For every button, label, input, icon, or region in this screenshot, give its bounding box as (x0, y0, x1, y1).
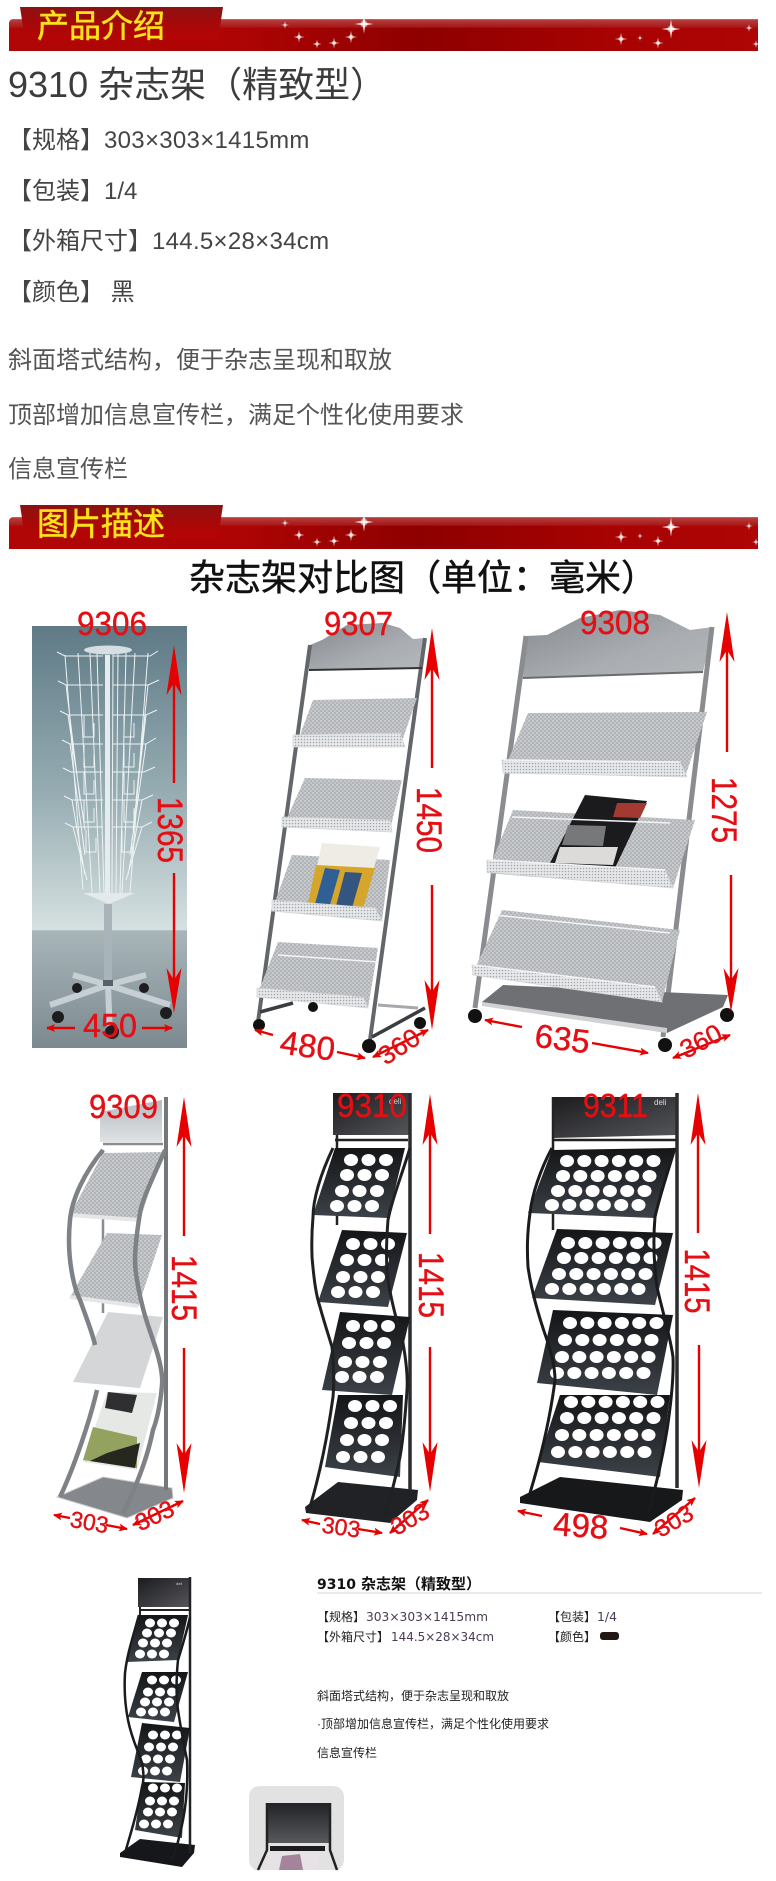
banner: image description: 图片描述 (37, 506, 165, 542)
text block: product features: 顶部增加信息宣传栏，满足个性化使用要求 (8, 402, 464, 429)
dimension labels: rack 9311: 303 (650, 1500, 698, 1543)
dimension labels: rack 9308: 360 (675, 1018, 727, 1064)
product: rack 9307 (253, 623, 426, 1053)
dimension labels: rack 9308 (485, 604, 743, 1064)
text block: mini features (317, 1688, 549, 1760)
text block: product features: 信息宣传栏 (8, 456, 128, 483)
product: rack 9306 (32, 626, 187, 1048)
dimension labels: rack 9306: 450 (83, 1007, 137, 1044)
product: rack 9311: deli (654, 1098, 667, 1107)
product: rack 9308 (468, 610, 734, 1052)
text block: mini product title: 9310 (317, 1577, 356, 1593)
text block: product features (8, 347, 464, 483)
text block: mini specifications: 【颜色】 (548, 1629, 596, 1644)
dimension labels: rack 9309: 303 (68, 1506, 111, 1538)
product: rack 9310: deli (389, 1097, 402, 1106)
thumbnail: rack detail (249, 1786, 344, 1870)
dimension labels: rack 9307: 480 (278, 1023, 337, 1068)
dimension labels: rack 9311 (518, 1093, 716, 1546)
dimension labels: rack 9307: 1450 (409, 787, 448, 853)
text block: product features: 斜面塔式结构，便于杂志呈现和取放 (8, 347, 392, 374)
text block: mini specifications (317, 1609, 617, 1644)
text block: mini features: 斜面塔式结构，便于杂志呈现和取放 (317, 1688, 509, 1703)
text block: mini specifications: 1/4 (597, 1610, 617, 1624)
text block: mini specifications: 【包装】 (548, 1610, 596, 1624)
dimension labels: rack 9308: 1275 (704, 777, 743, 843)
dimension labels: rack 9306: 1365 (150, 797, 189, 863)
dimension labels: rack 9309: 303 (131, 1496, 179, 1537)
product: rack 9309: 9309 (89, 1088, 158, 1125)
text block: mini specifications: 【外箱尺寸】 (317, 1629, 389, 1644)
text block: specifications (8, 127, 329, 306)
dimension labels: rack 9311: 498 (552, 1505, 610, 1546)
dimension labels: rack 9306: 9306 (77, 605, 147, 642)
product: rack 9310 (305, 1087, 418, 1523)
text block: mini specifications: 【规格】 (317, 1609, 365, 1624)
product: rack 9309 (57, 1088, 173, 1518)
magazine (550, 795, 647, 868)
heading: comparison chart: 杂志架对比图（单位：毫米） (189, 557, 657, 598)
text block: specifications: 【包装】1/4 (8, 178, 137, 205)
text block: mini product title (317, 1575, 762, 1593)
magazine (83, 1392, 157, 1470)
text block: specifications: 【规格】303×303×1415mm (8, 127, 310, 154)
title: product name: 9310 杂志架（精致型） (8, 64, 386, 105)
product: rack 9311: 9311 (583, 1087, 648, 1124)
dimension labels: rack 9308: 9308 (580, 604, 650, 641)
dimension labels: rack 9310: 1415 (411, 1252, 450, 1318)
dimension labels: rack 9310 (302, 1094, 450, 1543)
magazine (307, 843, 380, 915)
icon: black colour swatch (600, 1632, 619, 1640)
banner: product introduction: 产品介绍 (37, 8, 165, 44)
dimension labels: rack 9310: 303 (320, 1512, 362, 1543)
text block: specifications: 【颜色】 黑 (8, 279, 135, 306)
text block: mini specifications: 303×303×1415mm (366, 1610, 488, 1624)
text block: mini features: ·顶部增加信息宣传栏，满足个性化使用要求 (317, 1716, 549, 1731)
product photo: black rack 9310: deli (176, 1581, 182, 1586)
text block: specifications: 【外箱尺寸】144.5×28×34cm (8, 228, 329, 255)
dimension labels: rack 9308: 635 (533, 1017, 592, 1060)
dimension labels: rack 9309 (54, 1097, 203, 1538)
text block: mini product title: 杂志架（精致型） (361, 1575, 481, 1593)
product: rack 9311 (520, 1087, 683, 1522)
dimension labels: rack 9307 (255, 605, 448, 1071)
text block: mini specifications: 144.5×28×34cm (391, 1630, 494, 1644)
dimension labels: rack 9311: 1415 (677, 1248, 716, 1314)
banner: product introduction (9, 7, 760, 51)
product: rack 9310: 9310 (337, 1087, 407, 1124)
dimension labels: rack 9310: 303 (386, 1498, 434, 1541)
product photo: black rack 9310 (120, 1577, 195, 1867)
dimension labels: rack 9306 (47, 605, 189, 1044)
text block: mini features: 信息宣传栏 (317, 1745, 377, 1760)
dimension labels: rack 9309: 1415 (164, 1255, 203, 1321)
dimension labels: rack 9307: 9307 (324, 605, 393, 642)
dimension labels: rack 9307: 360 (373, 1022, 425, 1071)
banner: image description (9, 505, 760, 549)
